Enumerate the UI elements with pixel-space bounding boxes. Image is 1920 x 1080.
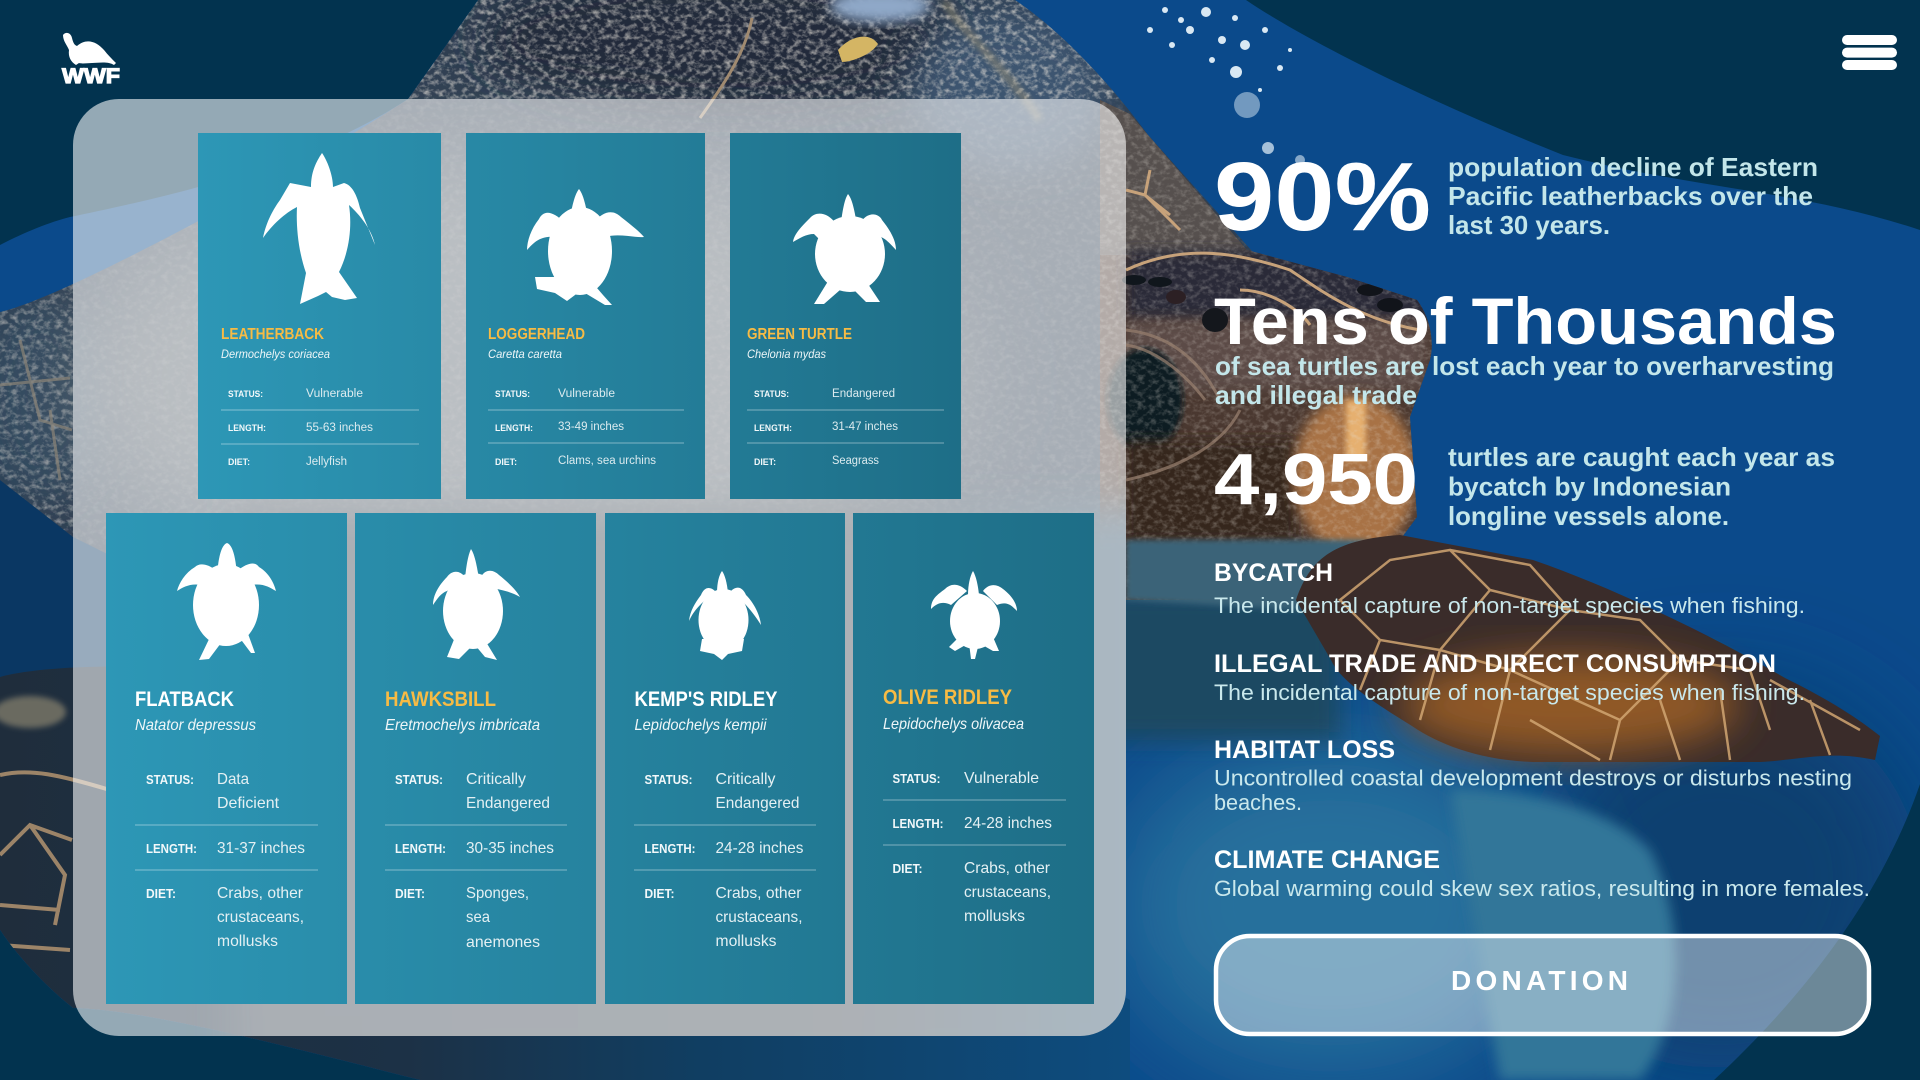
facts table: LENGTH: [892, 817, 944, 831]
icon: green turtle silhouette [793, 194, 896, 304]
logo: WWF turtle: WWF [62, 65, 120, 88]
stat: 4,950: 4,950 [1214, 440, 1418, 520]
latin name: Chelonia mydas [747, 349, 826, 361]
title: hawksbill: HAWKSBILL [385, 688, 496, 711]
stat description [1448, 442, 1835, 531]
stat description: bycatch by Indonesian [1448, 472, 1731, 502]
stat description: longline vessels alone. [1448, 501, 1729, 531]
facts table: Crabs, other [716, 885, 802, 902]
stat: 90%: 90% [1214, 142, 1431, 251]
facts table: DIET: [644, 887, 674, 901]
facts table: STATUS: [146, 773, 194, 787]
title: green turtle: GREEN TURTLE [747, 326, 852, 343]
facts table: DIET: [228, 457, 250, 468]
threat: bycatch [1214, 559, 1805, 618]
donation button: DONATION [1451, 965, 1628, 996]
threat: bycatch: The incidental capture of non-target species when fishing. [1214, 593, 1805, 618]
facts table: Endangered [832, 388, 895, 400]
facts table: LENGTH: [495, 423, 533, 434]
latin name: Natator depressus [135, 717, 256, 734]
facts table: crustaceans, [716, 909, 802, 926]
facts table: Endangered [466, 795, 550, 812]
facts table: STATUS: [495, 389, 530, 400]
threat: climate change: CLIMATE CHANGE [1214, 846, 1440, 874]
facts table [754, 388, 898, 468]
card: olive ridley [853, 513, 1094, 1004]
facts table: STATUS: [395, 773, 443, 787]
facts table: anemones [466, 934, 540, 951]
facts table [644, 771, 804, 950]
stat description [1215, 351, 1834, 410]
facts table: LENGTH: [395, 842, 446, 856]
threat: illegal trade [1214, 650, 1805, 705]
facts table [146, 771, 305, 950]
title: kemp's ridley: KEMP'S RIDLEY [634, 688, 778, 711]
facts table: STATUS: [644, 773, 692, 787]
facts table [495, 388, 656, 468]
facts table: 30-35 inches [466, 840, 554, 857]
threat: habitat loss: HABITAT LOSS [1214, 736, 1395, 764]
card: flatback [106, 513, 347, 1004]
stat description: turtles are caught each year as [1448, 442, 1835, 472]
facts table: Vulnerable [558, 388, 615, 400]
threat: illegal trade: ILLEGAL TRADE AND DIRECT CONSUMPTION [1214, 650, 1776, 678]
donation button [1216, 936, 1869, 1034]
facts table: 55-63 inches [306, 422, 373, 434]
facts table: crustaceans, [964, 884, 1051, 901]
facts table: Seagrass [832, 455, 879, 467]
stat description: of sea turtles are lost each year to overharvesting [1215, 351, 1834, 381]
card: loggerhead [466, 133, 705, 499]
threat: illegal trade: The incidental capture of non-target species when fishing. [1214, 680, 1805, 705]
facts table: mollusks [716, 933, 776, 950]
latin name: Caretta caretta [488, 349, 562, 361]
logo: WWF turtle [62, 33, 120, 88]
facts table: Critically [716, 771, 776, 788]
facts table: STATUS: [754, 389, 789, 400]
stat: 4,950 [1214, 440, 1835, 531]
facts table: DIET: [754, 457, 776, 468]
main translucent panel [73, 99, 1126, 1036]
facts table: Endangered [716, 795, 800, 812]
facts table: DIET: [395, 887, 425, 901]
stat description: population decline of Eastern [1448, 152, 1818, 182]
threat: climate change [1214, 846, 1870, 901]
background: turtle flipper [1296, 535, 1880, 762]
latin name: Dermochelys coriacea [221, 349, 330, 361]
stat: tens of thousands [1214, 284, 1837, 410]
facts table: Data [217, 771, 249, 788]
facts table: Vulnerable [306, 388, 363, 400]
threat: bycatch: BYCATCH [1214, 559, 1333, 587]
latin name: Lepidochelys kempii [634, 717, 767, 734]
facts table [395, 771, 554, 951]
title: flatback: FLATBACK [135, 688, 234, 711]
card: green turtle [730, 133, 961, 499]
facts table: Crabs, other [217, 885, 304, 902]
facts table: DIET: [146, 887, 176, 901]
facts table: Crabs, other [964, 860, 1051, 877]
facts table: 31-37 inches [217, 840, 305, 857]
background: turtle head [1100, 100, 1440, 600]
icon: leatherback silhouette [263, 153, 375, 304]
facts table: 31-47 inches [832, 421, 898, 433]
threat: climate change: Global warming could skew sex ratios, resulting in more females. [1214, 876, 1870, 901]
background: turtle shell [0, 0, 1252, 553]
threat: habitat loss: beaches. [1214, 790, 1302, 815]
facts table: Sponges, [466, 885, 529, 902]
stat description [1448, 152, 1818, 240]
facts table: Deficient [217, 795, 280, 812]
facts table: DIET: [495, 457, 517, 468]
card: hawksbill [355, 513, 596, 1004]
facts table: LENGTH: [754, 423, 792, 434]
stat description: last 30 years. [1448, 210, 1610, 240]
icon: hawksbill silhouette [433, 549, 520, 660]
latin name: Eretmochelys imbricata [385, 717, 540, 734]
facts table: LENGTH: [228, 423, 266, 434]
threat: habitat loss [1214, 736, 1852, 815]
icon: loggerhead silhouette [527, 189, 644, 305]
photo tone behind panel lower half [230, 510, 1170, 1070]
stat: tens of thousands: Tens of Thousands [1214, 284, 1837, 358]
facts table: 33-49 inches [558, 421, 624, 433]
stat: 90% [1214, 142, 1818, 251]
background: lower shell and net pattern [0, 667, 1130, 1080]
icon: kemp's ridley silhouette [689, 571, 761, 660]
card: leatherback [198, 133, 441, 499]
threat: habitat loss: Uncontrolled coastal development destroys or disturbs nesting [1214, 766, 1852, 790]
facts table: LENGTH: [644, 842, 696, 856]
title: loggerhead: LOGGERHEAD [488, 326, 585, 343]
facts table: STATUS: [228, 389, 263, 400]
facts table: crustaceans, [217, 909, 304, 926]
background: turtle neck [1126, 540, 1370, 610]
card: kemp's ridley [605, 513, 845, 1004]
facts table: Critically [466, 771, 526, 788]
facts table: LENGTH: [146, 842, 197, 856]
menu icon [1842, 35, 1897, 70]
facts table: 24-28 inches [716, 840, 804, 857]
icon: olive ridley silhouette [931, 571, 1017, 659]
icon: flatback silhouette [177, 543, 276, 660]
facts table: Clams, sea urchins [558, 455, 656, 467]
facts table: STATUS: [892, 772, 940, 786]
facts table: Vulnerable [964, 770, 1039, 787]
title: olive ridley: OLIVE RIDLEY [883, 686, 1012, 709]
title: leatherback: LEATHERBACK [221, 326, 324, 343]
facts table: DIET: [892, 862, 922, 876]
stat description: and illegal trade [1215, 380, 1417, 410]
facts table [228, 388, 373, 468]
background: bubbles [1147, 7, 1305, 165]
facts table: sea [466, 909, 490, 926]
facts table: mollusks [217, 933, 278, 950]
latin name: Lepidochelys olivacea [883, 716, 1024, 733]
facts table: mollusks [964, 908, 1025, 925]
facts table [892, 770, 1052, 925]
facts table: Jellyfish [306, 456, 347, 468]
facts table: 24-28 inches [964, 815, 1052, 832]
stat description: Pacific leatherbacks over the [1448, 181, 1813, 211]
